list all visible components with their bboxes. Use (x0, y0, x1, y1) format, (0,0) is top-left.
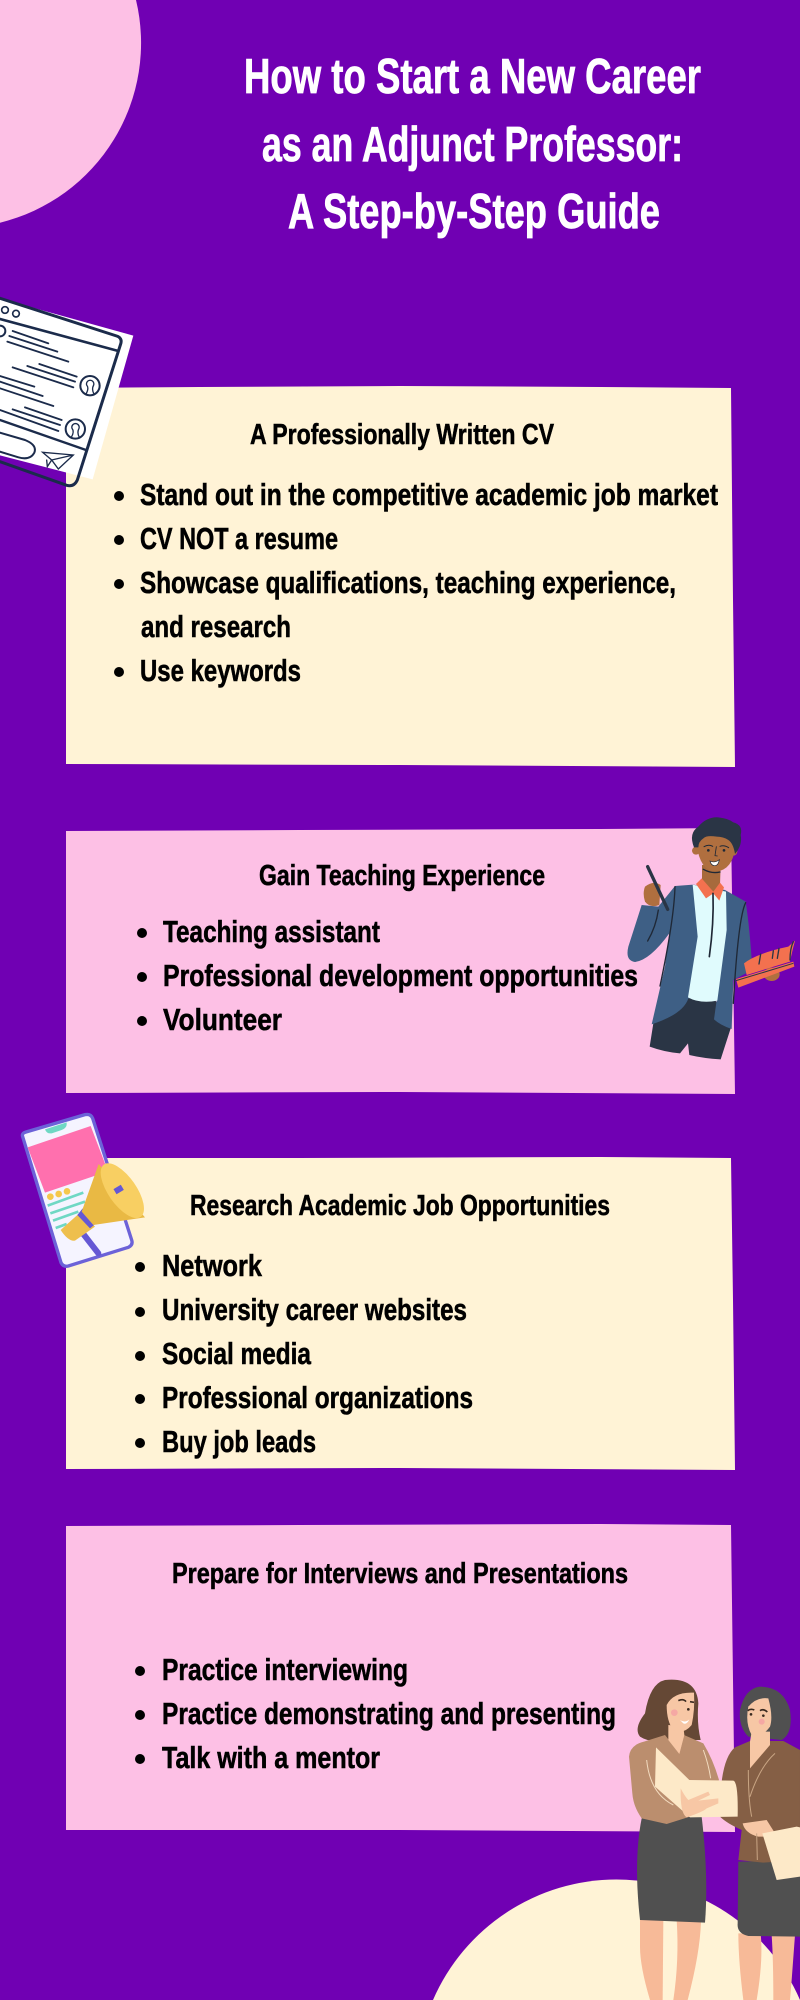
panel: research academic job opportunities (66, 1157, 735, 1470)
heading: research: Research Academic Job Opportunities (190, 1190, 610, 1222)
bullet list: CV: Showcase qualifications, teaching experience, (140, 566, 676, 600)
icon: teacher with pen and book (627, 817, 795, 1059)
title (244, 50, 701, 239)
heading: interviews: Prepare for Interviews and Presentations (172, 1558, 628, 1590)
heading: teaching: Gain Teaching Experience (259, 860, 545, 892)
title: A Step-by-Step Guide (288, 185, 660, 239)
bullet list: research: Social media (162, 1337, 312, 1371)
bullet list: CV: Use keywords (140, 654, 301, 688)
icon: CV document on chat window (0, 298, 133, 486)
bullet list: interviews (135, 1653, 616, 1775)
bullet list: research: Network (162, 1249, 262, 1283)
bullet list: interviews: Talk with a mentor (162, 1741, 380, 1775)
bullet list: research (135, 1249, 473, 1459)
bullet list: research: University career websites (162, 1293, 467, 1327)
decorative circle: top left pink (0, 0, 141, 223)
bullet list: interviews: Practice interviewing (162, 1653, 408, 1687)
woman with brown hair (629, 1680, 738, 2000)
bullet list: research: Buy job leads (162, 1425, 316, 1459)
heading: CV: A Professionally Written CV (250, 419, 554, 451)
panel: a professionally written CV (66, 386, 735, 767)
bullet list: CV: and research (141, 610, 291, 644)
bullet list: teaching: Volunteer (163, 1003, 282, 1037)
bullet list: CV (114, 478, 718, 688)
bullet list: teaching: Professional development opportunities (163, 959, 638, 993)
bullet list: research: Professional organizations (162, 1381, 473, 1415)
icon: two women with documents (629, 1680, 800, 2000)
bullet list: teaching: Teaching assistant (163, 915, 380, 949)
decorative circle: bottom right cream (433, 1880, 800, 2000)
icon: phone with megaphone (22, 1114, 152, 1266)
woman with grey hair (720, 1687, 800, 2000)
bullet list: teaching (137, 915, 638, 1037)
bullet list: interviews: Practice demonstrating and presenting (162, 1697, 616, 1731)
panel: prepare for interviews and presentations (66, 1524, 735, 1832)
panel: gain teaching experience (66, 828, 735, 1094)
bullet list: CV: CV NOT a resume (140, 522, 338, 556)
